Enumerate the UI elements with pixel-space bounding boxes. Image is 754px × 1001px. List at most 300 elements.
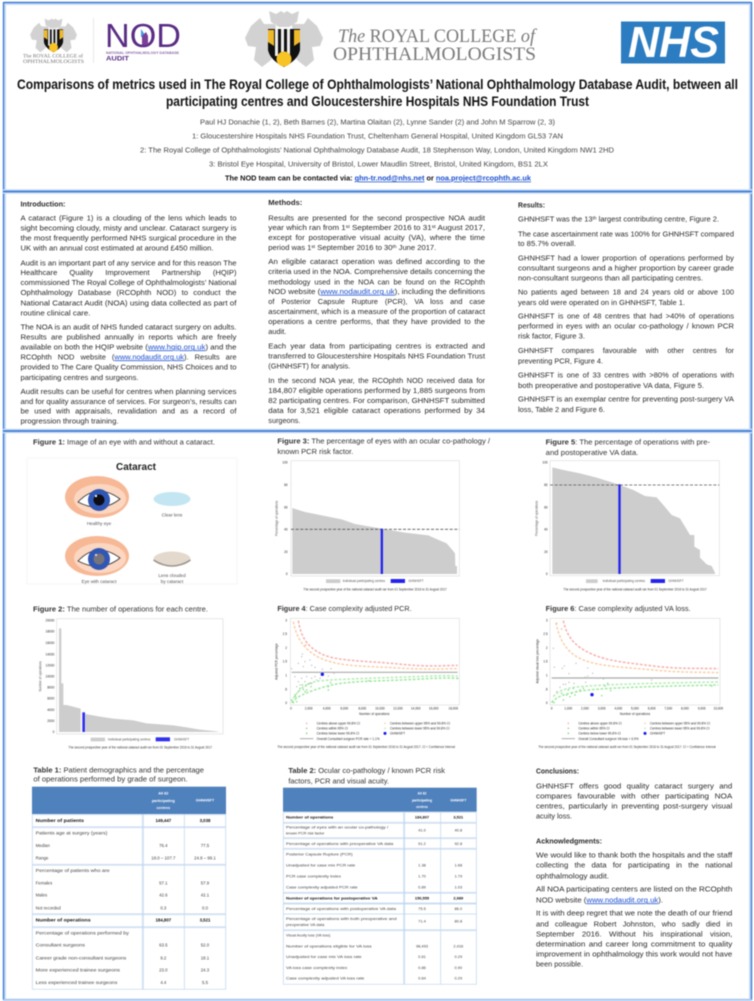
table rows: 0.90 (455, 965, 463, 970)
text: audit year: Results are presented for the second prospective NOA audit (268, 213, 486, 222)
text: audit year: year which ran from 1 (268, 223, 341, 232)
text: data transfer: Each year data from participating centres is extracted and (268, 341, 485, 350)
y axis labels: 0 (53, 730, 55, 734)
axis labels: 7,000 (664, 706, 673, 710)
caption: figure 3 (277, 437, 491, 456)
footnote: The second prospective year of the national cataract audit ran from 01 September 2016 to 31 August 2017. CI = Confidence Interval (277, 745, 455, 749)
legend: Centres above upper 99.8% CI (317, 721, 360, 725)
table rows: 5.5 (202, 980, 209, 985)
text: results findings: GHNHSFT is one of 33 centres with >80% of operations with (518, 371, 734, 380)
logo: NHS: NHS (628, 18, 719, 67)
text: results findings: GHNHSFT compares favourable with other centres for (518, 346, 734, 355)
table rows: 57.1 (159, 880, 168, 885)
text: uses of audit results (20, 387, 237, 425)
table rows: Consultant surgeons (36, 943, 85, 948)
legend: Overall Consultant surgeon PCR rate = 1.1% (317, 737, 380, 741)
text: data volume: surgeons. (268, 416, 300, 425)
footnote: The second prospective year of the national cataract audit ran from 01 September 2016 to 31 August 2017 (303, 587, 447, 591)
y axis labels: 40 (284, 528, 288, 532)
legend: Centres below lower 99.8% CI (317, 731, 359, 735)
text: audit year: August 2017, (436, 223, 485, 232)
table rows: 76.4 (159, 843, 168, 848)
legend: GHNHSFT (390, 731, 405, 735)
table rows: known PCR risk factor (286, 830, 325, 835)
text: uses of audit results: Audit results can be useful for centres when planning services (20, 387, 237, 396)
text: about the NOA (20, 322, 237, 382)
table rows: Range (36, 855, 49, 860)
reference line at 80 percent (550, 484, 719, 486)
text: audit year (268, 213, 486, 252)
legend: Overall Consultant surgeon VA loss = 0.9% (578, 737, 639, 741)
table rows: Number of operations eligible for VA loss (286, 943, 372, 948)
caption: table 1 (33, 765, 204, 784)
table header: centres (157, 806, 170, 810)
table rows: 41.0 (418, 828, 427, 833)
logo caption: OPHTHALMOLOGISTS (23, 59, 84, 65)
legend: GHNHSFT (668, 579, 684, 583)
text: audit importance: Audit is an important part of any service and for this reason The (20, 258, 236, 267)
heading: methods: Methods: (268, 198, 302, 207)
y axis labels: 80 (284, 483, 288, 487)
logo: Royal College wordmark (333, 27, 538, 65)
panel: methods (268, 198, 486, 425)
table rows: 0.89 (418, 884, 426, 889)
table rows: 24.3 (201, 968, 210, 973)
legend: GHNHSFT (174, 737, 189, 741)
table rows: 9.2 (160, 955, 167, 960)
table rows: Number of operations (286, 815, 334, 820)
overall rate line (292, 671, 458, 674)
overall rate line (552, 676, 718, 680)
logo: NOD audit: AUDIT (106, 56, 129, 62)
y axis labels: 6000 (47, 697, 55, 701)
text: audit importance: routine clinical care. (20, 308, 90, 317)
axis labels: 8,000 (681, 706, 689, 710)
text: dedication: and colleague Robert Johnston, who sadly died in (536, 919, 732, 928)
text: data volume: 82 participating centres. For comparison, GHNHSFT submitted (268, 396, 485, 405)
label: eye with cataract: Eye with cataract (82, 579, 117, 584)
y axis labels: 20 (544, 550, 548, 554)
axis labels: 10,000 (714, 706, 723, 710)
axis labels: 2,000 (581, 706, 589, 710)
axis labels: 3 (285, 618, 287, 622)
bar: GHNHSFT (381, 529, 383, 574)
caption: figure 5: Figure 5: The percentage of operations with pre- (546, 437, 710, 446)
icon: clouded lens (154, 552, 190, 566)
table rows: 0.29 (455, 954, 462, 959)
table rows: Percentage of operations performed by (36, 930, 130, 935)
table rows: Visual Acuity loss (VA loss) (286, 932, 331, 937)
table rows: 98,493 (416, 943, 429, 948)
scatter points (552, 623, 712, 703)
table rows: 0.86 (418, 965, 427, 970)
axis labels: 2,000 (305, 706, 313, 710)
legend: GHNHSFT (650, 731, 665, 735)
table rows: Percentage of patients who are (36, 868, 110, 873)
text: results findings (518, 215, 735, 414)
bars (292, 508, 457, 574)
table rows: Number of patients (36, 818, 85, 823)
label: clouded lens: Lens clouded (158, 573, 186, 578)
label: clear lens: Clear lens (162, 512, 183, 518)
table rows: Unadjusted for case mix PCR rate (286, 863, 355, 868)
y axis labels: 16000 (46, 641, 55, 645)
axis labels: 6,000 (648, 706, 656, 710)
table rows: 0.3 (160, 905, 167, 910)
table rows: 3,521 (200, 918, 211, 923)
legend: Individual participating centres (603, 579, 646, 583)
figure 5: bar chart of VA data (535, 437, 719, 591)
caption: figure 3: known PCR risk factor. (277, 447, 353, 456)
table rows: More experienced trainee surgeons (36, 968, 120, 973)
table rows: 86.0 (455, 906, 463, 911)
legend (91, 737, 189, 741)
text: eligibility: ascertainment, which is a measure of the proportion of cataract (268, 307, 486, 316)
table header (283, 788, 477, 812)
legend: Centres within 95% CI (578, 726, 610, 730)
table rows: 1.70 (418, 873, 427, 878)
axis labels: Number of operations (620, 712, 651, 716)
table rows: 184,807 (156, 918, 172, 923)
y axis title: Percentage of operations (535, 500, 539, 536)
reference line at 40 percent (291, 528, 459, 531)
text: about the NOA: participating centres and surgeons. (20, 373, 138, 382)
text: uses of audit results: progression through training. (20, 416, 118, 425)
table rows: Median (36, 843, 50, 848)
y axis labels: 2000 (47, 719, 55, 723)
table rows: 80.8 (455, 919, 463, 924)
axis labels: 3,000 (598, 706, 606, 710)
text: results findings: non-consultant surgeons than all participating centres. (518, 273, 703, 282)
image title: Cataract (116, 462, 157, 473)
point: GHNHSFT (590, 693, 594, 696)
text: eligibility: operations a centre performs, that they have provided to the (268, 317, 485, 326)
y axis labels: 12000 (46, 663, 55, 667)
table rows: Posterior Capsule Rupture (PCR) (286, 852, 353, 857)
logo: Royal College small crest (30, 19, 77, 52)
icon: healthy eye (65, 476, 129, 518)
y axis labels (542, 461, 548, 576)
heading: conclusions: Conclusions: (536, 766, 579, 775)
text: audit importance: Healthcare Quality Improvement Partnership (HQIP) (20, 268, 237, 277)
text: audit importance (20, 258, 237, 317)
text: results findings: both preoperative and postoperative VA data, Figure 5. (518, 381, 704, 390)
table rows: 0.64 (418, 976, 427, 981)
y axis labels (282, 461, 288, 576)
panel: header (17, 11, 738, 182)
legend: Centres between lower 95% and 99.8% CI (390, 726, 450, 730)
footnote: The second prospective year of the national cataract audit ran from 01 September 2016 to 31 August 2017. CI = Confidence Interval (538, 745, 716, 749)
text: data volume: 184,807 eligible operations performed by 1,885 surgeons from (268, 386, 485, 395)
legend: Centres between lower 95% and 99.8% CI (650, 726, 710, 730)
axis labels: 2 (285, 646, 287, 650)
logo: Royal College wordmark: OPHTHALMOLOGISTS (333, 45, 536, 65)
text: about the NOA: Results are published annually in reports which are freely (20, 332, 237, 341)
text: results findings: loss, Table 2 and Figure 6. (518, 405, 605, 414)
text: results findings: No patients aged between 18 and 24 years old or above 100 (518, 288, 734, 297)
caption: figure 2: Figure 2: The number of operations for each centre. (33, 605, 208, 614)
table rows: 77.5 (201, 843, 210, 848)
axis labels: Adjusted visual loss percentage (535, 639, 539, 684)
axis labels: Adjusted PCR percentage (274, 643, 278, 680)
text: data transfer: transferred to Gloucestershire Hospitals NHS Foundation Trust (268, 351, 486, 360)
table rows: 2,989 (453, 895, 464, 900)
y axis labels: 0 (546, 572, 548, 576)
panel: acknowledgments (536, 836, 733, 969)
table rows: 1.38 (418, 863, 427, 868)
text: results findings: The case ascertainment rate was 100% for GHNHSFT compared (518, 230, 734, 239)
text: uses of audit results: be used with appraisals, revalidation and as a record of (20, 406, 237, 415)
table rows: 42.6 (159, 893, 168, 898)
text: audit year: September 2016 to 30 (315, 243, 393, 252)
text: results findings: to 85.7% overall. (518, 239, 576, 248)
axis labels: 0 (285, 701, 287, 705)
heading: acknowledgments: Acknowledgments: (536, 836, 602, 845)
authors and affiliations: 3: Bristol Eye Hospital, University of Bristol, Lower Maudlin Street, Bristol, United Kingdom, BS1 2LX (209, 160, 548, 168)
axis labels: 9,000 (698, 706, 706, 710)
text: results findings: th (593, 216, 597, 222)
text: eligibility: NOD website ( www.nodaudit.org.uk ), including the definitions (268, 287, 485, 296)
caption: figure 5 (546, 437, 710, 457)
table rows: 52.0 (201, 943, 210, 948)
authors and affiliations: Paul HJ Donachie (1, 2), Beth Barnes (2), Martina Olaitan (2), Lynne Sander (2) and John M Sparrow (2, 3) (200, 118, 555, 126)
y axis title: Number of operations (38, 661, 42, 692)
text: dedication: September 2016. Without his inspirational vision, (536, 929, 732, 938)
text: cataract definition: the most frequently performed NHS surgical procedure in the (20, 234, 236, 243)
figure 4: funnel plot of adjusted PCR (274, 604, 459, 749)
table rows: 75.5 (418, 906, 427, 911)
table rows: 18.0 – 107.7 (151, 855, 176, 860)
label: clouded lens: by cataract (161, 579, 184, 584)
table rows: 0.61 (418, 954, 426, 959)
legend: Centres below lower 99.8% CI (578, 731, 621, 735)
funnel limits (552, 621, 718, 703)
text: results findings: performed in eyes with an ocular co-pathology / known PCR (518, 322, 735, 331)
panel: conclusions (536, 766, 733, 821)
text: audit year: st (311, 244, 316, 250)
axis labels: 14,000 (411, 706, 421, 710)
axis labels: 2.5 (283, 632, 287, 636)
table rows (36, 818, 216, 985)
text: audit importance: commissioned The Royal College of Ophthalmologists’ National (20, 278, 237, 287)
figure 2: bar chart of operations per centre (33, 605, 223, 750)
figure 6: funnel plot of adjusted VA loss (535, 604, 723, 749)
authors and affiliations (140, 118, 614, 168)
y axis labels: 60 (544, 505, 548, 509)
scatter points (292, 645, 458, 703)
table rows: 3,038 (200, 818, 211, 823)
y axis labels: 14000 (46, 652, 55, 656)
y axis labels: 20 (284, 550, 288, 554)
text: audit year: period was 1 (268, 243, 311, 252)
y axis labels: 80 (544, 483, 548, 487)
text: data transfer: (GHNHSFT) for analysis. (268, 361, 350, 370)
text: dedication: been possible. (536, 960, 583, 969)
axis labels: 0 (290, 706, 292, 710)
y axis labels: 10000 (46, 675, 55, 679)
table header (32, 787, 226, 814)
bars (552, 467, 715, 574)
table rows: Percentage of eyes with an ocular co-pathology / (286, 825, 389, 830)
text: audit year: except for postoperative visual acuity (VA), where the time (268, 233, 485, 242)
table rows: 150,555 (415, 895, 430, 900)
table rows: 71.4 (418, 919, 427, 924)
text: audit year: September 2016 to 31 (350, 223, 432, 232)
axis labels: 4,000 (614, 706, 623, 710)
logo: Royal College large crest (245, 11, 323, 67)
table rows: 24.8 – 99.1 (194, 855, 216, 860)
table header: All 82 (158, 792, 168, 796)
table rows: 92.8 (455, 841, 463, 846)
title: participating centres and Gloucestershire Hospitals NHS Foundation Trust (166, 94, 589, 109)
y axis labels: 20000 (46, 618, 55, 622)
caption: figure 4: Figure 4: Case complexity adjusted PCR. (277, 604, 412, 613)
y axis labels: 18000 (46, 630, 55, 634)
axis labels: 0 (546, 701, 548, 705)
table rows: PCR case complexity index (286, 873, 341, 878)
table rows: Number of operations (36, 918, 91, 923)
text: conclusions: GHNHSFT offers good quality cataract surgery and (536, 782, 732, 791)
table rows: VA loss case complexity index (286, 965, 347, 970)
table rows (286, 815, 464, 981)
axis labels: 0 (551, 706, 553, 710)
table rows: Females (36, 880, 52, 885)
text: cataract definition (20, 214, 237, 253)
axis labels: .5 (284, 687, 287, 691)
axis labels (535, 618, 723, 716)
text: thanks: We would like to thank both the hospitals and the staff (536, 851, 733, 860)
table rows: Case complexity adjusted VA loss rate (286, 976, 364, 981)
contact line: The NOD team can be contacted via: ghn-tr.nod@nhs.net or noa.project@rcophth.ac.uk (225, 174, 532, 182)
axis labels: 4,000 (323, 706, 331, 710)
text: results findings: consultant surgeons and a higher proportion by career grade (518, 263, 734, 272)
axis labels: 2 (546, 646, 548, 650)
y axis labels: 40 (544, 528, 548, 532)
caption: table 2: Table 2: Ocular co-pathology / known PCR risk (288, 766, 445, 775)
table header: GHNHSFT (196, 799, 215, 803)
bar: GHNHSFT (82, 712, 85, 732)
text: dedication (536, 909, 733, 969)
text: uses of audit results: and for quality assurance of services. For surgeon’s, results can (20, 397, 236, 406)
caption: figure 6: Figure 6: Case complexity adjusted VA loss. (546, 604, 691, 613)
authors and affiliations: 2: The Royal College of Ophthalmologists’ National Ophthalmology Database Audit, 18 Stephenson Way, London, United Kingdom NW1 2HD (140, 146, 614, 154)
figure 3: bar chart of ocular co-pathology (275, 437, 491, 591)
text: conclusions: compares favourable with other participating NOA (536, 792, 733, 801)
table rows: Percentage of operations with postoperative VA data (286, 906, 397, 911)
bars (59, 628, 221, 732)
text: thanks: ophthalmology audit. (536, 871, 609, 880)
text: about the NOA: available on both the HQIP website ( www.hqip.org.uk ) and the (20, 342, 237, 351)
icon: eye with cataract (65, 536, 129, 576)
text: results findings: preventing PCR, Figure 4. (518, 356, 603, 365)
text: results findings: GHNHSFT is an exemplar centre for preventing post-surgery VA (518, 395, 735, 404)
heading: results: Results: (518, 200, 545, 209)
text: data volume (268, 376, 485, 425)
text: eligibility: methodology used in the NOA can be found on the RCOphth (268, 277, 485, 286)
axis labels: 1,000 (564, 706, 573, 710)
table rows: Males (36, 893, 47, 898)
text: audit year: th (393, 244, 397, 250)
table rows: 42.1 (201, 893, 210, 898)
axis labels: .5 (545, 687, 548, 691)
caption: table 1: of operations performed by grade of surgeon. (33, 775, 188, 784)
axis labels: 8,000 (358, 706, 367, 710)
text: dedication: It is with deep regret that we note the death of our friend (536, 909, 732, 918)
table rows: 23.0 (159, 968, 168, 973)
axis labels: 12,000 (393, 706, 403, 710)
caption: table 2: factors, PCR and visual acuity. (288, 776, 389, 785)
table rows: 40.8 (455, 828, 463, 833)
text: data transfer (268, 341, 486, 370)
y axis title: Percentage of operations (275, 500, 279, 536)
legend: Centres between upper 95% and 99.8% CI (650, 721, 710, 725)
text: eligibility: An eligible cataract operation was defined according to the (268, 257, 485, 266)
logo: NOD audit: NATIONAL OPHTHALMOLOGY DATABASE (106, 51, 180, 55)
legend (562, 721, 710, 741)
table rows: Less experienced trainee surgeons (36, 980, 117, 985)
table rows: 2,416 (453, 943, 464, 948)
axis labels: 2.5 (543, 632, 548, 636)
axis labels: 3 (546, 618, 548, 622)
text: centres listing (536, 885, 732, 904)
text: eligibility: audit. (268, 327, 286, 336)
text: conclusions: acuity loss. (536, 812, 572, 821)
table rows: Not recorded (36, 905, 61, 910)
table rows: Career grade non-consultant surgeons (36, 955, 126, 960)
logo: Royal College wordmark: The ROYAL COLLEGE of (338, 27, 538, 47)
legend: Centres within 95% CI (317, 726, 348, 730)
text: results findings: largest contributing centre, Figure 2. (597, 215, 719, 224)
legend: Centres between upper 95% and 99.8% CI (390, 721, 450, 725)
axis labels: 16,000 (429, 706, 439, 710)
logo caption: The ROYAL COLLEGE of (23, 52, 83, 60)
text: cataract definition: sight becoming cloudy, misty and unclear. Cataract surgery is (20, 224, 237, 233)
table rows: Case complexity adjusted PCR rate (286, 884, 358, 889)
caption: table 2 (288, 766, 445, 785)
table rows: 4.4 (160, 980, 167, 985)
table rows: 1.03 (455, 884, 463, 889)
table rows: 63.5 (159, 943, 168, 948)
table header: participating (412, 798, 432, 802)
funnel limits (292, 621, 458, 703)
table rows: 57.9 (201, 880, 210, 885)
legend (326, 579, 424, 583)
table rows: Number of operations for postoperative VA (286, 895, 378, 900)
text: audit importance: National Cataract Audit (NOA) using data collected as part of (20, 298, 237, 307)
bar: GHNHSFT (618, 484, 621, 574)
text: about the NOA: The NOA is an audit of NHS funded cataract surgery on adults. (20, 322, 236, 331)
table rows: 1.68 (455, 863, 463, 868)
logo: NOD audit: NOD (105, 17, 181, 54)
figure 1: cataract image (27, 438, 237, 584)
legend (586, 579, 684, 583)
axis labels: 1 (285, 673, 287, 677)
axis labels: Number of operations (359, 712, 390, 716)
legend: Individual participating centres (108, 737, 151, 741)
text: cataract definition: UK with an annual cost estimated at around £450 million. (20, 244, 214, 253)
text: dedication: determination and career long commitment to quality (536, 940, 733, 949)
axis labels: 1.5 (283, 660, 287, 664)
y axis labels (46, 618, 55, 734)
axis labels: 6,000 (340, 706, 349, 710)
text: results findings: years old were operated on in GHNHSFT, Table 1. (518, 298, 685, 307)
caption: table 1: Table 1: Patient demographics and the percentage (33, 765, 204, 774)
table rows: preoperative VA data (286, 922, 325, 927)
table header: centres (416, 805, 428, 809)
axis labels: 18,000 (449, 706, 458, 710)
label: clouded lens (158, 573, 186, 584)
table rows: 1.79 (455, 873, 462, 878)
